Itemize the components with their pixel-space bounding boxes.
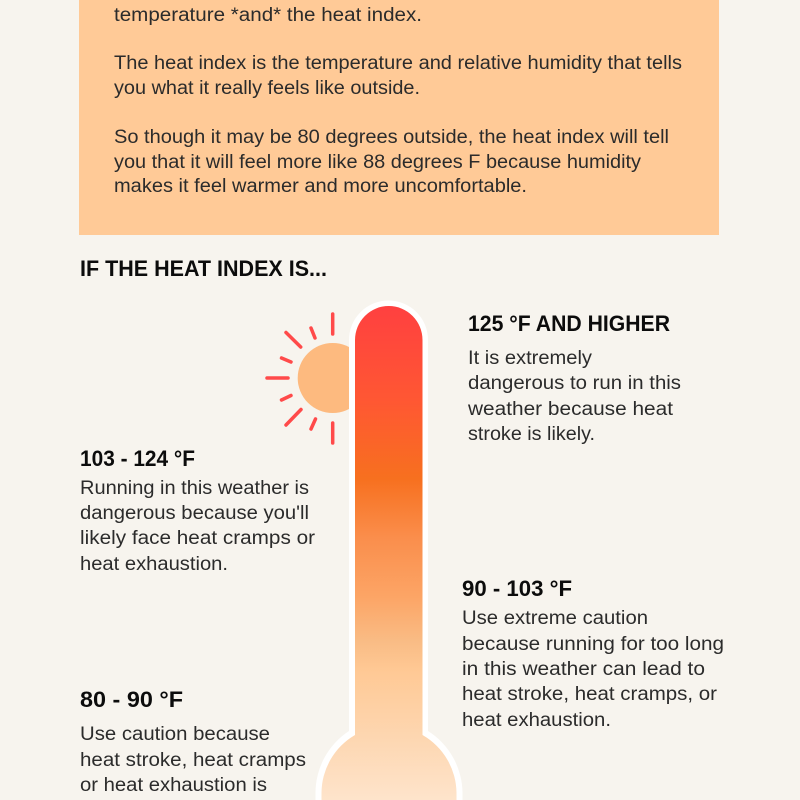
text block: 103 to 124 F	[80, 446, 316, 575]
text block: 90 to 103 F: Use extreme caution	[462, 608, 648, 629]
thermometer	[316, 301, 462, 800]
text block: 103 to 124 F: 103 - 124 °F	[80, 446, 195, 471]
thermometer white outline	[316, 301, 462, 800]
text block: 90 to 103 F: heat exhaustion.	[462, 710, 611, 731]
text block: 103 to 124 F: heat exhaustion.	[80, 554, 228, 575]
text block: 125 F and higher: It is extremely	[468, 348, 593, 369]
text block: 80 degrees example: So though it may be 80 degrees outside, the heat index will tell	[114, 127, 669, 148]
panel background	[79, 0, 719, 235]
text block: 125 F and higher: 125 °F AND HIGHER	[468, 311, 670, 336]
text block: temperature and heat index: temperature *and* the heat index.	[114, 5, 422, 26]
text block: 103 to 124 F: dangerous because you'll	[80, 503, 309, 524]
panel: heat index explanation	[79, 0, 719, 235]
text block: 90 to 103 F: in this weather can lead to	[462, 659, 705, 680]
text block: 80 to 90 F: heat stroke, heat cramps	[80, 750, 306, 771]
text block: 103 to 124 F: Running in this weather is	[80, 478, 309, 499]
heading: if the heat index is: IF THE HEAT INDEX IS...	[80, 256, 327, 281]
text block: heat index definition: you what it really feels like outside.	[114, 78, 420, 99]
text block: 80 to 90 F: Use caution because	[80, 724, 270, 745]
text block: 103 to 124 F: likely face heat cramps or	[80, 528, 316, 549]
text block: 80 to 90 F: or heat exhaustion is	[80, 775, 267, 796]
text block: 80 degrees example	[114, 127, 669, 197]
text block: 80 to 90 F: 80 - 90 °F	[80, 687, 183, 712]
thermometer gradient fill	[322, 306, 456, 800]
text block: 125 F and higher: stroke is likely.	[468, 424, 595, 445]
text block: 125 F and higher: dangerous to run in this	[468, 373, 681, 394]
text block: 80 degrees example: you that it will feel more like 88 degrees F because humidity	[114, 152, 642, 173]
text block: 80 degrees example: makes it feel warmer and more uncomfortable.	[114, 176, 527, 197]
text block: 80 to 90 F	[80, 687, 306, 796]
text block: 125 F and higher: weather because heat	[467, 399, 674, 420]
text block: 90 to 103 F	[462, 576, 724, 731]
text block: 90 to 103 F: heat stroke, heat cramps, or	[462, 684, 718, 705]
icon: sun	[267, 314, 368, 443]
text block: 90 to 103 F: 90 - 103 °F	[462, 576, 572, 601]
text block: 90 to 103 F: because running for too long	[462, 634, 724, 655]
text block: 125 F and higher	[467, 311, 681, 445]
text block: heat index definition: The heat index is the temperature and relative humidity that tells	[114, 53, 682, 74]
text block: heat index definition	[114, 53, 682, 99]
